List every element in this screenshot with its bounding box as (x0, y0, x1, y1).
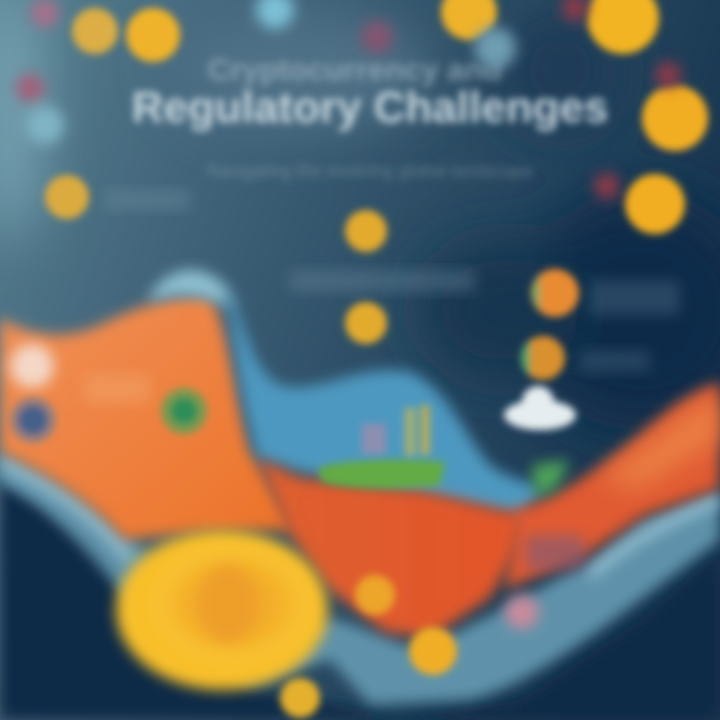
green accent right (532, 460, 570, 495)
light crest on orange wave (150, 270, 235, 310)
item: center coin one (290, 210, 475, 292)
pale edge of lower wave (0, 462, 720, 575)
title (132, 52, 608, 181)
green band (318, 460, 445, 488)
coins right column (625, 85, 708, 234)
icon: white badge left (10, 344, 54, 388)
pink icon bottom (505, 595, 539, 629)
item: green orange badge (521, 336, 565, 380)
light blue lower wave (0, 448, 720, 705)
orange highlight on right wave (600, 395, 720, 490)
item: center coin two (345, 302, 387, 344)
background glow (0, 0, 720, 430)
lower dark band (0, 480, 720, 720)
title: Navigating the evolving global landscape (207, 161, 533, 181)
blue middle wave (225, 285, 545, 518)
small bar chart (362, 405, 430, 456)
coins top row (72, 0, 659, 62)
red right wave (505, 382, 720, 590)
small pink icons top left (16, 0, 516, 144)
icon: white cloud (504, 386, 576, 430)
orange wave label (85, 375, 150, 403)
icon: green badge (161, 388, 207, 434)
item: left coin with text (45, 175, 190, 219)
icon: dark badge left (10, 397, 56, 443)
red tags by coins (562, 0, 681, 199)
small coins bottom (280, 575, 457, 718)
item: orange green badge (531, 269, 579, 317)
item: green badge text (580, 350, 650, 372)
title: Cryptocurrency and (208, 52, 502, 87)
item: orange badge text (590, 280, 680, 315)
red middle wave (258, 458, 525, 638)
large gold coin (116, 530, 328, 690)
right wave badge (525, 535, 585, 570)
orange left wave (0, 297, 295, 540)
title: Regulatory Challenges (132, 83, 608, 132)
